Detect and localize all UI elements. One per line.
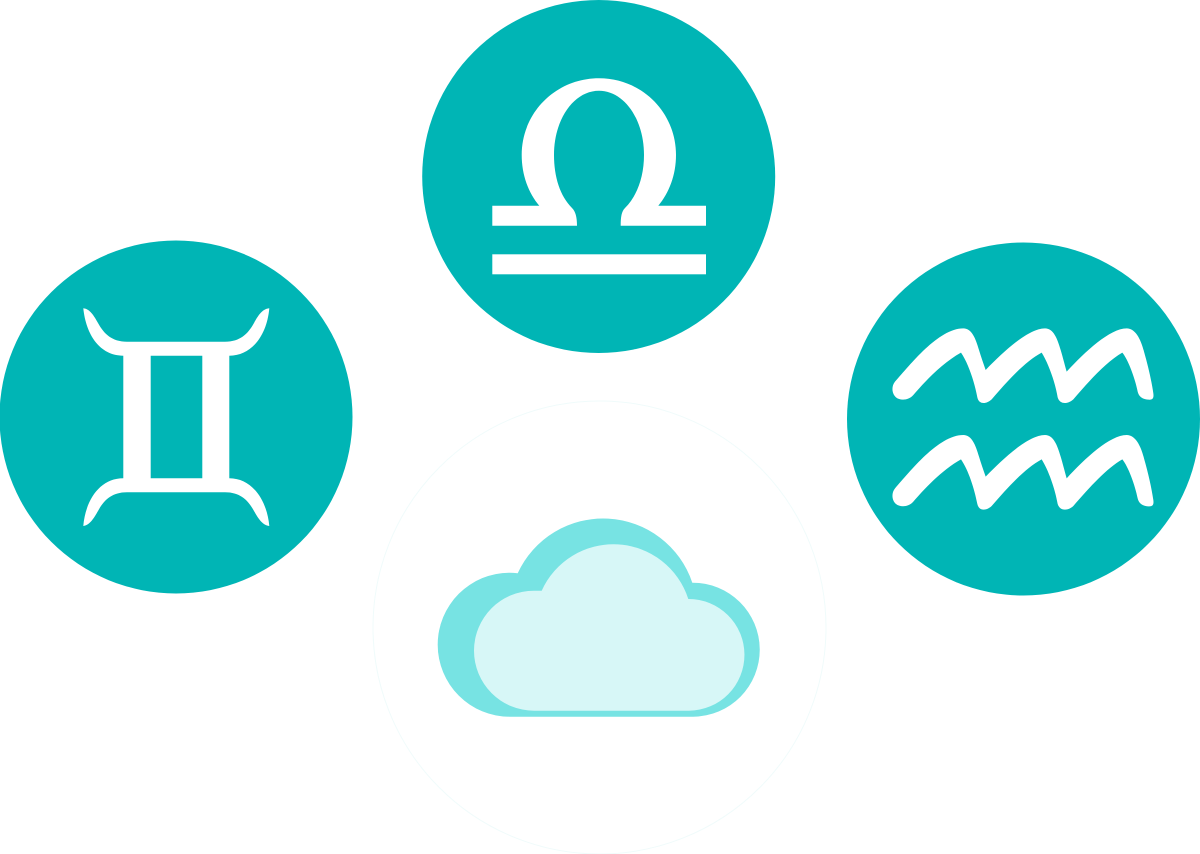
badge: Libra bbox=[422, 0, 775, 353]
icon: Gemini symbol bbox=[83, 308, 269, 526]
icon: cloud back bbox=[438, 518, 760, 717]
icon: Libra symbol bbox=[492, 78, 706, 274]
badge: cloud bbox=[373, 401, 826, 854]
badge: Aquarius bbox=[847, 242, 1200, 596]
icon: Aquarius symbol bbox=[892, 328, 1153, 510]
badge: Gemini bbox=[0, 240, 352, 594]
icon: cloud front bbox=[474, 544, 744, 711]
